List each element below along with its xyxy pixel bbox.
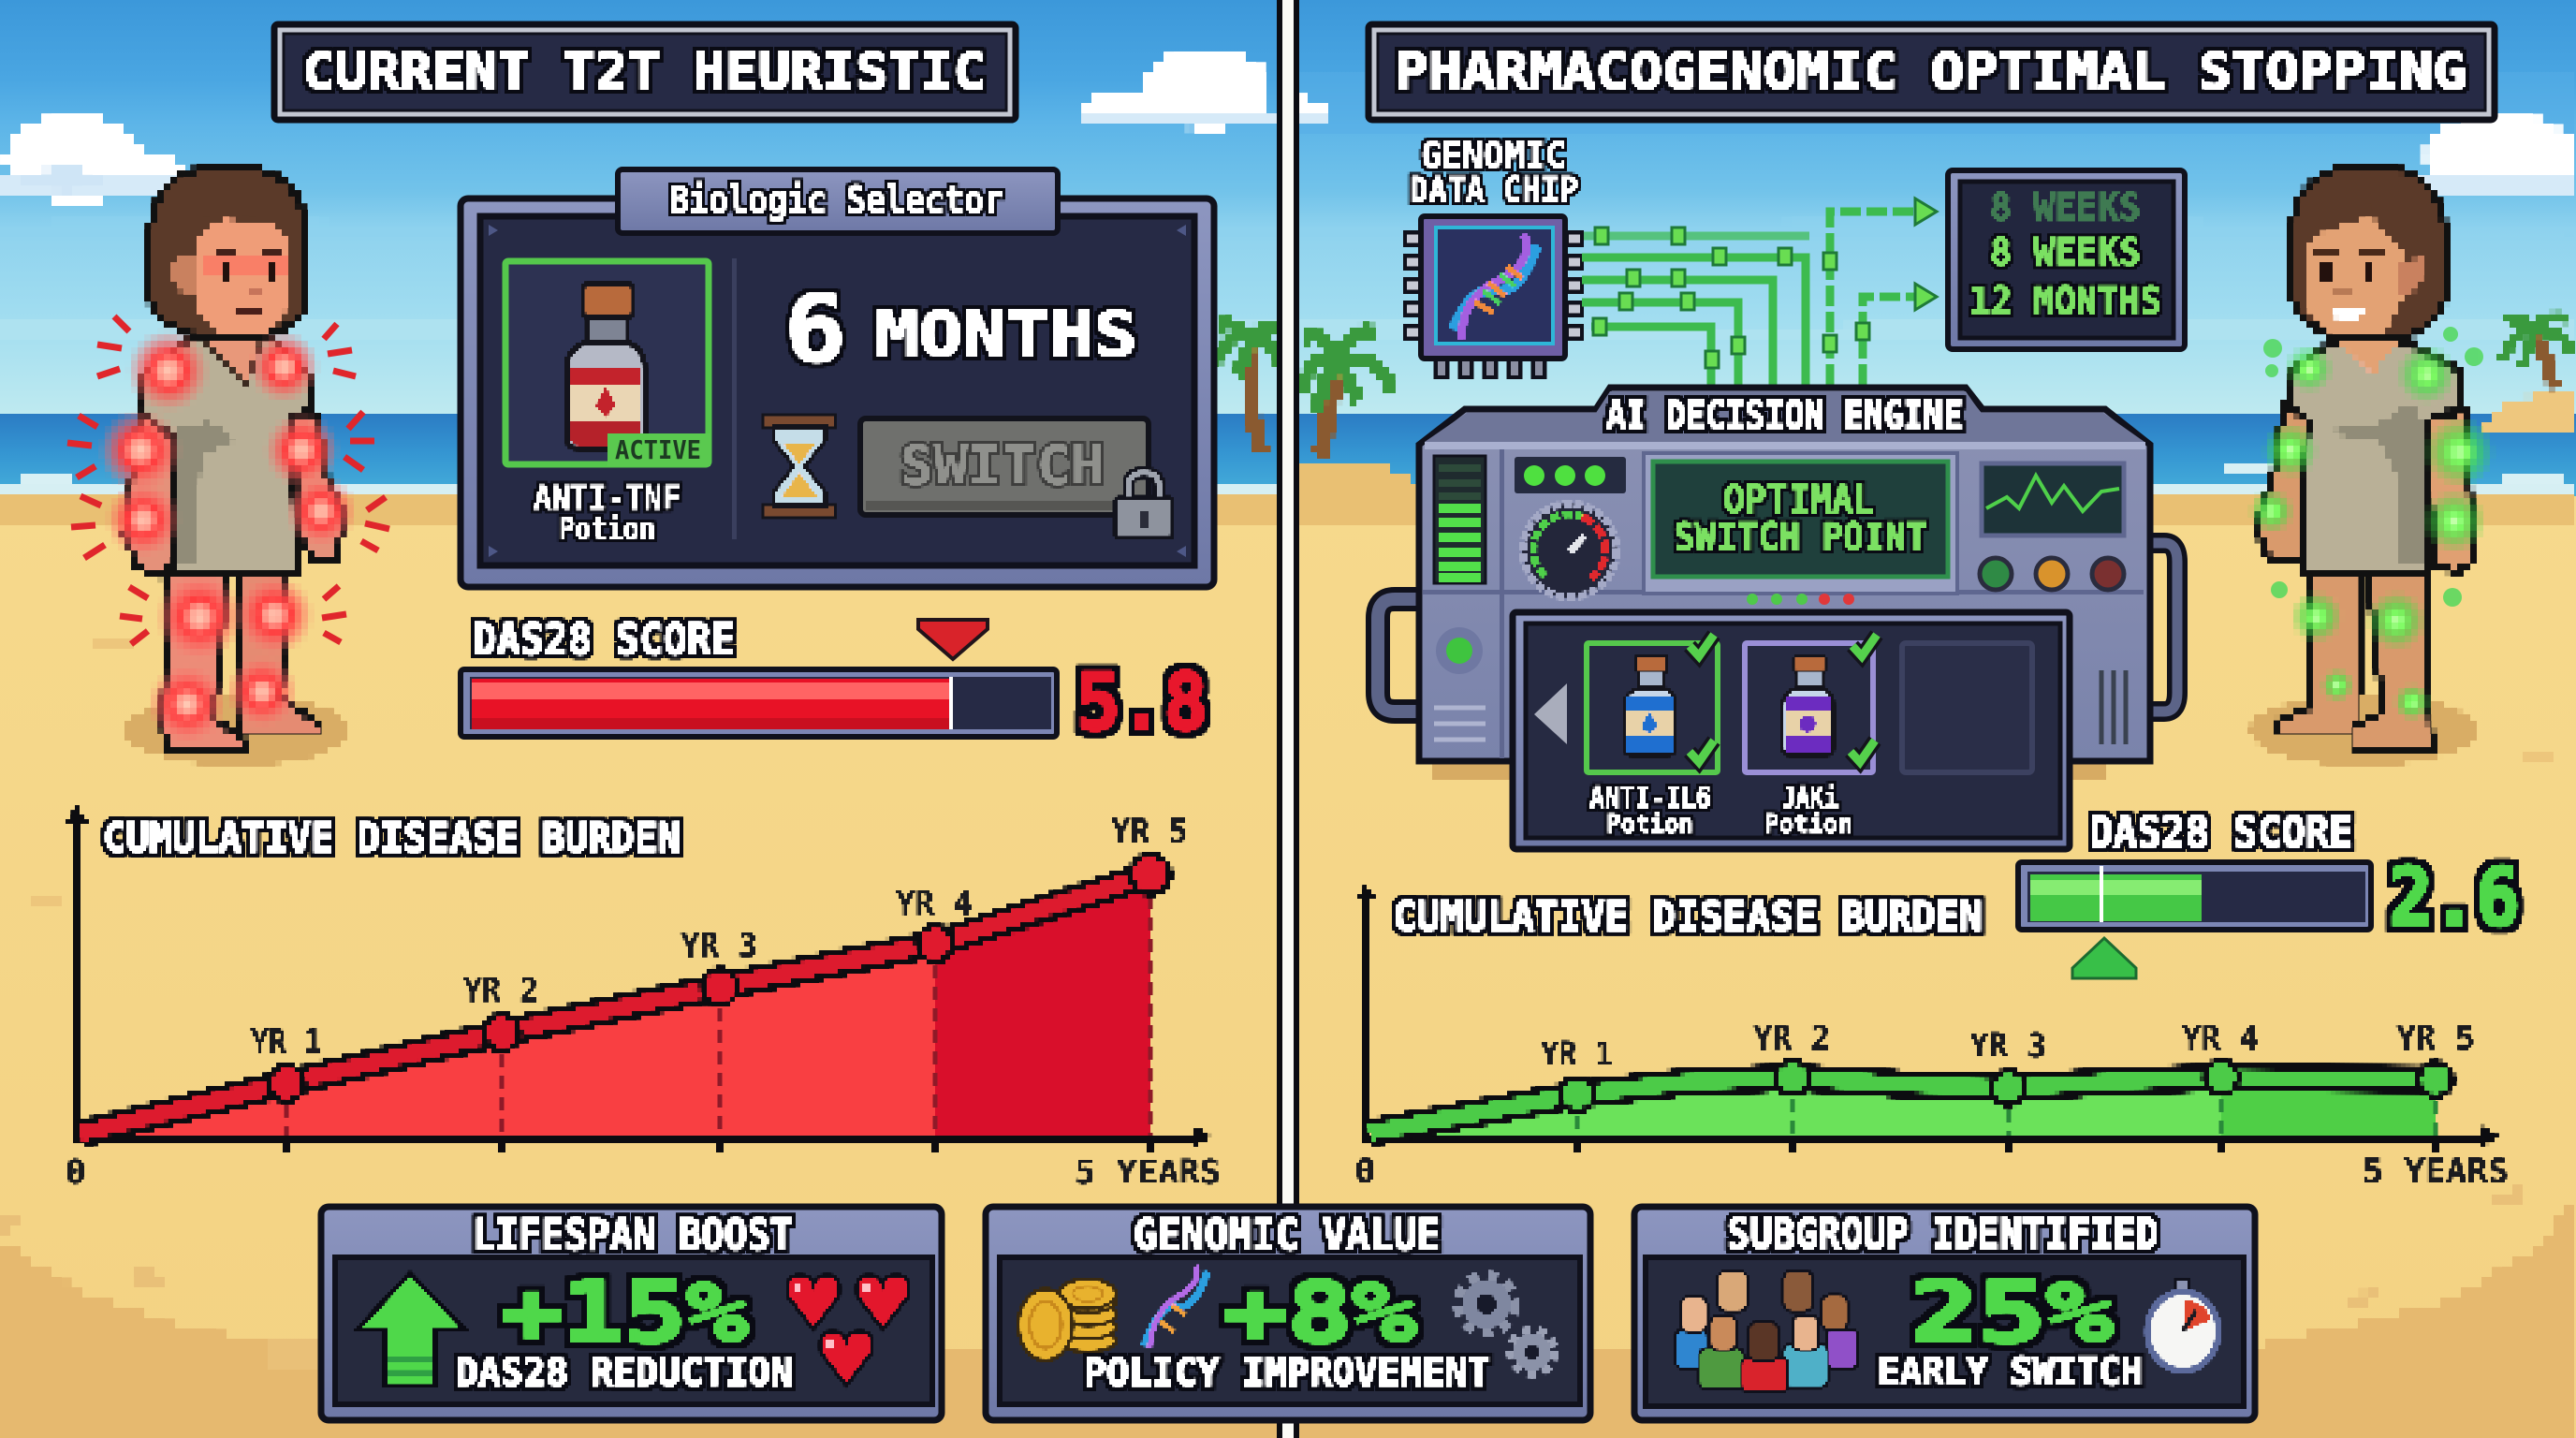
year labels: YR 4 <box>2182 1020 2259 1058</box>
stat panel: subgroup identified: 25% <box>1910 1264 2114 1362</box>
label: anti-TNF potion: ANTI-TNF <box>534 479 681 518</box>
character: healthy patient <box>2249 166 2495 766</box>
DAS28 score gauge: current <box>461 614 1208 748</box>
year labels: YR 2 <box>1753 1020 1830 1058</box>
year labels: 5 YEARS <box>1075 1153 1221 1192</box>
title: pharmacogenomic optimal stopping: PHARMACOGENOMIC OPTIMAL STOPPING <box>1395 42 2466 101</box>
year labels: YR 1 <box>1541 1035 1613 1074</box>
card: JAKi potion <box>1745 643 1873 772</box>
icon: stopwatch <box>2147 1279 2218 1371</box>
chip label: GENOMIC <box>1421 135 1566 176</box>
level meter <box>1434 456 1486 583</box>
chip pins <box>1403 239 1584 379</box>
DAS28 score gauge: current: DAS28 SCORE <box>473 614 735 665</box>
panel tab: biologic selector heading <box>618 169 1058 233</box>
duration: 6 months <box>784 274 1137 384</box>
stat panel: lifespan boost: DAS28 REDUCTION <box>456 1350 793 1395</box>
label: anti-TNF potion <box>534 479 681 547</box>
status LEDs <box>1515 457 1626 493</box>
year labels: 0 <box>65 1153 86 1192</box>
icon: hearts <box>787 1275 909 1386</box>
year labels: YR 5 <box>2396 1020 2475 1058</box>
year labels: YR 3 <box>1969 1027 2046 1065</box>
year labels: YR 5 <box>1111 813 1188 851</box>
DAS28 score gauge: current: 5.8 <box>1076 656 1208 748</box>
monitor: switch timings <box>1948 170 2185 349</box>
monitor: switch timings: 12 MONTHS <box>1969 278 2161 324</box>
checkmarks <box>1690 635 1877 762</box>
card: active anti-TNF potion: ACTIVE <box>615 434 701 465</box>
arrows into monitor <box>1915 198 1937 310</box>
icon: left arrow <box>1534 683 1567 744</box>
card: anti-IL6 potion <box>1587 643 1718 772</box>
icon: coins <box>1018 1279 1116 1360</box>
potion labels: ANTI-IL6 <box>1589 780 1711 815</box>
chart title: CUMULATIVE DISEASE BURDEN <box>103 814 681 862</box>
duration: 6 months: 6 <box>784 274 846 384</box>
icon: DNA strand <box>1144 1266 1208 1348</box>
card: active anti-TNF potion <box>505 261 710 466</box>
stat panel: subgroup identified: SUBGROUP IDENTIFIED <box>1727 1209 2159 1259</box>
screen: optimal switch point: SWITCH POINT <box>1674 514 1927 560</box>
label: anti-TNF potion: Potion <box>559 510 655 547</box>
checkmark fills <box>1690 635 1877 762</box>
chart: cumulative disease burden, rising <box>65 806 1221 1192</box>
stat panel: genomic value <box>986 1207 1590 1420</box>
icon: padlock <box>1116 473 1172 537</box>
duration: 6 months: MONTHS <box>875 299 1137 371</box>
button: locked switch: SWITCH <box>900 433 1105 497</box>
character: patient in pain <box>67 166 389 766</box>
card: empty slot <box>1902 643 2032 772</box>
potion labels <box>1589 780 1852 839</box>
year labels: YR 2 <box>463 972 538 1010</box>
genomic data chip <box>1403 135 1584 379</box>
year labels: 0 <box>1354 1152 1376 1191</box>
icon: gears <box>1457 1275 1555 1374</box>
chip label: DATA CHIP <box>1410 169 1578 211</box>
gauge <box>1523 504 1617 597</box>
monitor: switch timings: 8 WEEKS <box>1990 231 2141 274</box>
oscilloscope <box>1982 463 2124 536</box>
screen: optimal switch point: OPTIMAL <box>1723 477 1875 522</box>
title: current T2T heuristic: CURRENT T2T HEURISTIC <box>302 42 986 101</box>
potion labels: Potion <box>1764 808 1852 839</box>
palm trees <box>1213 316 2570 456</box>
icon: DNA helix <box>1453 234 1537 339</box>
icon: patient group <box>1676 1270 1858 1392</box>
chart line <box>1354 885 2499 1148</box>
DAS28 score gauge: optimised: DAS28 SCORE <box>2089 807 2353 858</box>
DAS28 score gauge: optimised: 2.6 <box>2389 851 2520 945</box>
stat panel: lifespan boost <box>321 1207 942 1420</box>
year labels: YR 1 <box>251 1023 322 1062</box>
axes <box>77 814 1198 1152</box>
icon: green up arrow <box>358 1273 464 1386</box>
stat panel: lifespan boost: +15% <box>501 1264 748 1362</box>
monitor: switch timings: 8 WEEKS <box>1990 186 2141 229</box>
year labels <box>1354 1020 2509 1191</box>
stat panel: genomic value: +8% <box>1223 1264 1416 1362</box>
pain sparks <box>67 316 389 644</box>
stat panel: genomic value: POLICY IMPROVEMENT <box>1084 1350 1490 1395</box>
chart title: CUMULATIVE DISEASE BURDEN <box>1393 893 1983 941</box>
panel: biologic selector <box>461 169 1214 587</box>
title: current T2T heuristic <box>274 24 1016 120</box>
year labels: YR 4 <box>896 885 973 923</box>
machine handles <box>1378 543 2177 712</box>
axes <box>1366 894 2485 1152</box>
year labels: 5 YEARS <box>2363 1152 2509 1191</box>
potion labels: Potion <box>1606 808 1693 839</box>
screen: optimal switch point <box>1644 453 1957 594</box>
stat panel: subgroup identified <box>1634 1207 2255 1420</box>
machine title: AI DECISION ENGINE <box>1606 392 1963 438</box>
drawer: alternative potions <box>1513 612 2070 849</box>
title: pharmacogenomic optimal stopping <box>1368 24 2495 120</box>
centre divider <box>1277 0 1299 1438</box>
chart line <box>66 806 1211 1148</box>
clouds <box>0 48 2576 204</box>
knobs <box>1980 558 2124 590</box>
circuit traces <box>1582 198 1937 385</box>
small indicator lights <box>1747 594 1854 605</box>
healing sparkles <box>2263 327 2483 607</box>
panel tab: biologic selector heading: Biologic Selector <box>669 177 1003 223</box>
AI decision engine machine <box>1378 388 2177 849</box>
DAS28 score gauge: optimised <box>2018 807 2520 978</box>
icon: hourglass <box>764 416 835 517</box>
chart: cumulative disease burden, flat <box>1354 885 2509 1191</box>
year labels <box>65 813 1221 1192</box>
stat panel: genomic value: GENOMIC VALUE <box>1134 1210 1441 1260</box>
potion labels: JAKi <box>1781 780 1838 815</box>
side indicator and vents <box>1434 627 2126 744</box>
stat panel: lifespan boost: LIFESPAN BOOST <box>473 1210 793 1260</box>
stat panel: subgroup identified: EARLY SWITCH <box>1878 1349 2143 1394</box>
button: locked switch <box>860 418 1149 515</box>
chip label <box>1410 135 1578 211</box>
year labels: YR 3 <box>681 927 757 965</box>
